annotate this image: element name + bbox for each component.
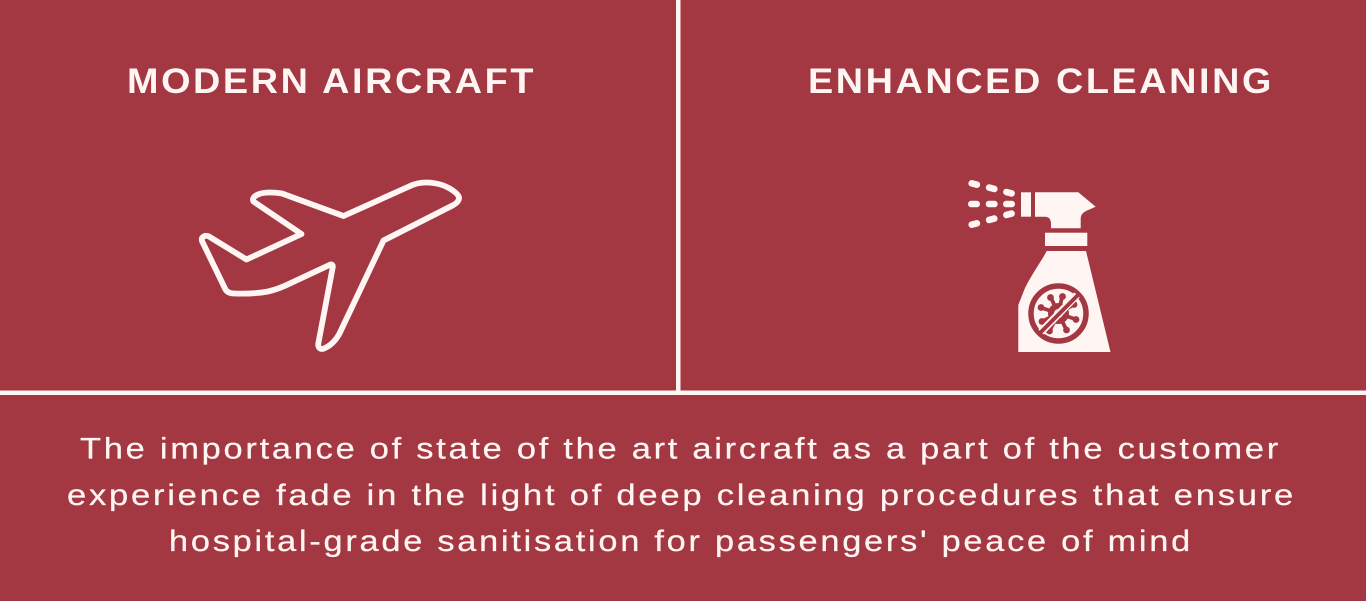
body text: experience fade in the light of deep cleaning procedures that ensure [67, 479, 1296, 512]
icon: spray bottle with virus symbol [968, 179, 1110, 352]
sprayer nozzle and head [1021, 192, 1096, 246]
heading: enhanced cleaning: ENHANCED CLEANING [808, 62, 1274, 101]
no-virus symbol [1031, 286, 1086, 341]
virus spikes [1042, 297, 1075, 330]
body text [67, 432, 1296, 558]
bottle body [1018, 251, 1110, 352]
heading: modern aircraft: MODERN AIRCRAFT [127, 62, 536, 101]
spray droplets [968, 179, 1016, 229]
icon: airplane outline [202, 182, 459, 349]
virus knobs [1038, 293, 1079, 334]
body text: The importance of state of the art aircraft as a part of the customer [80, 432, 1281, 466]
body text: hospital-grade sanitisation for passengers' peace of mind [169, 525, 1193, 558]
